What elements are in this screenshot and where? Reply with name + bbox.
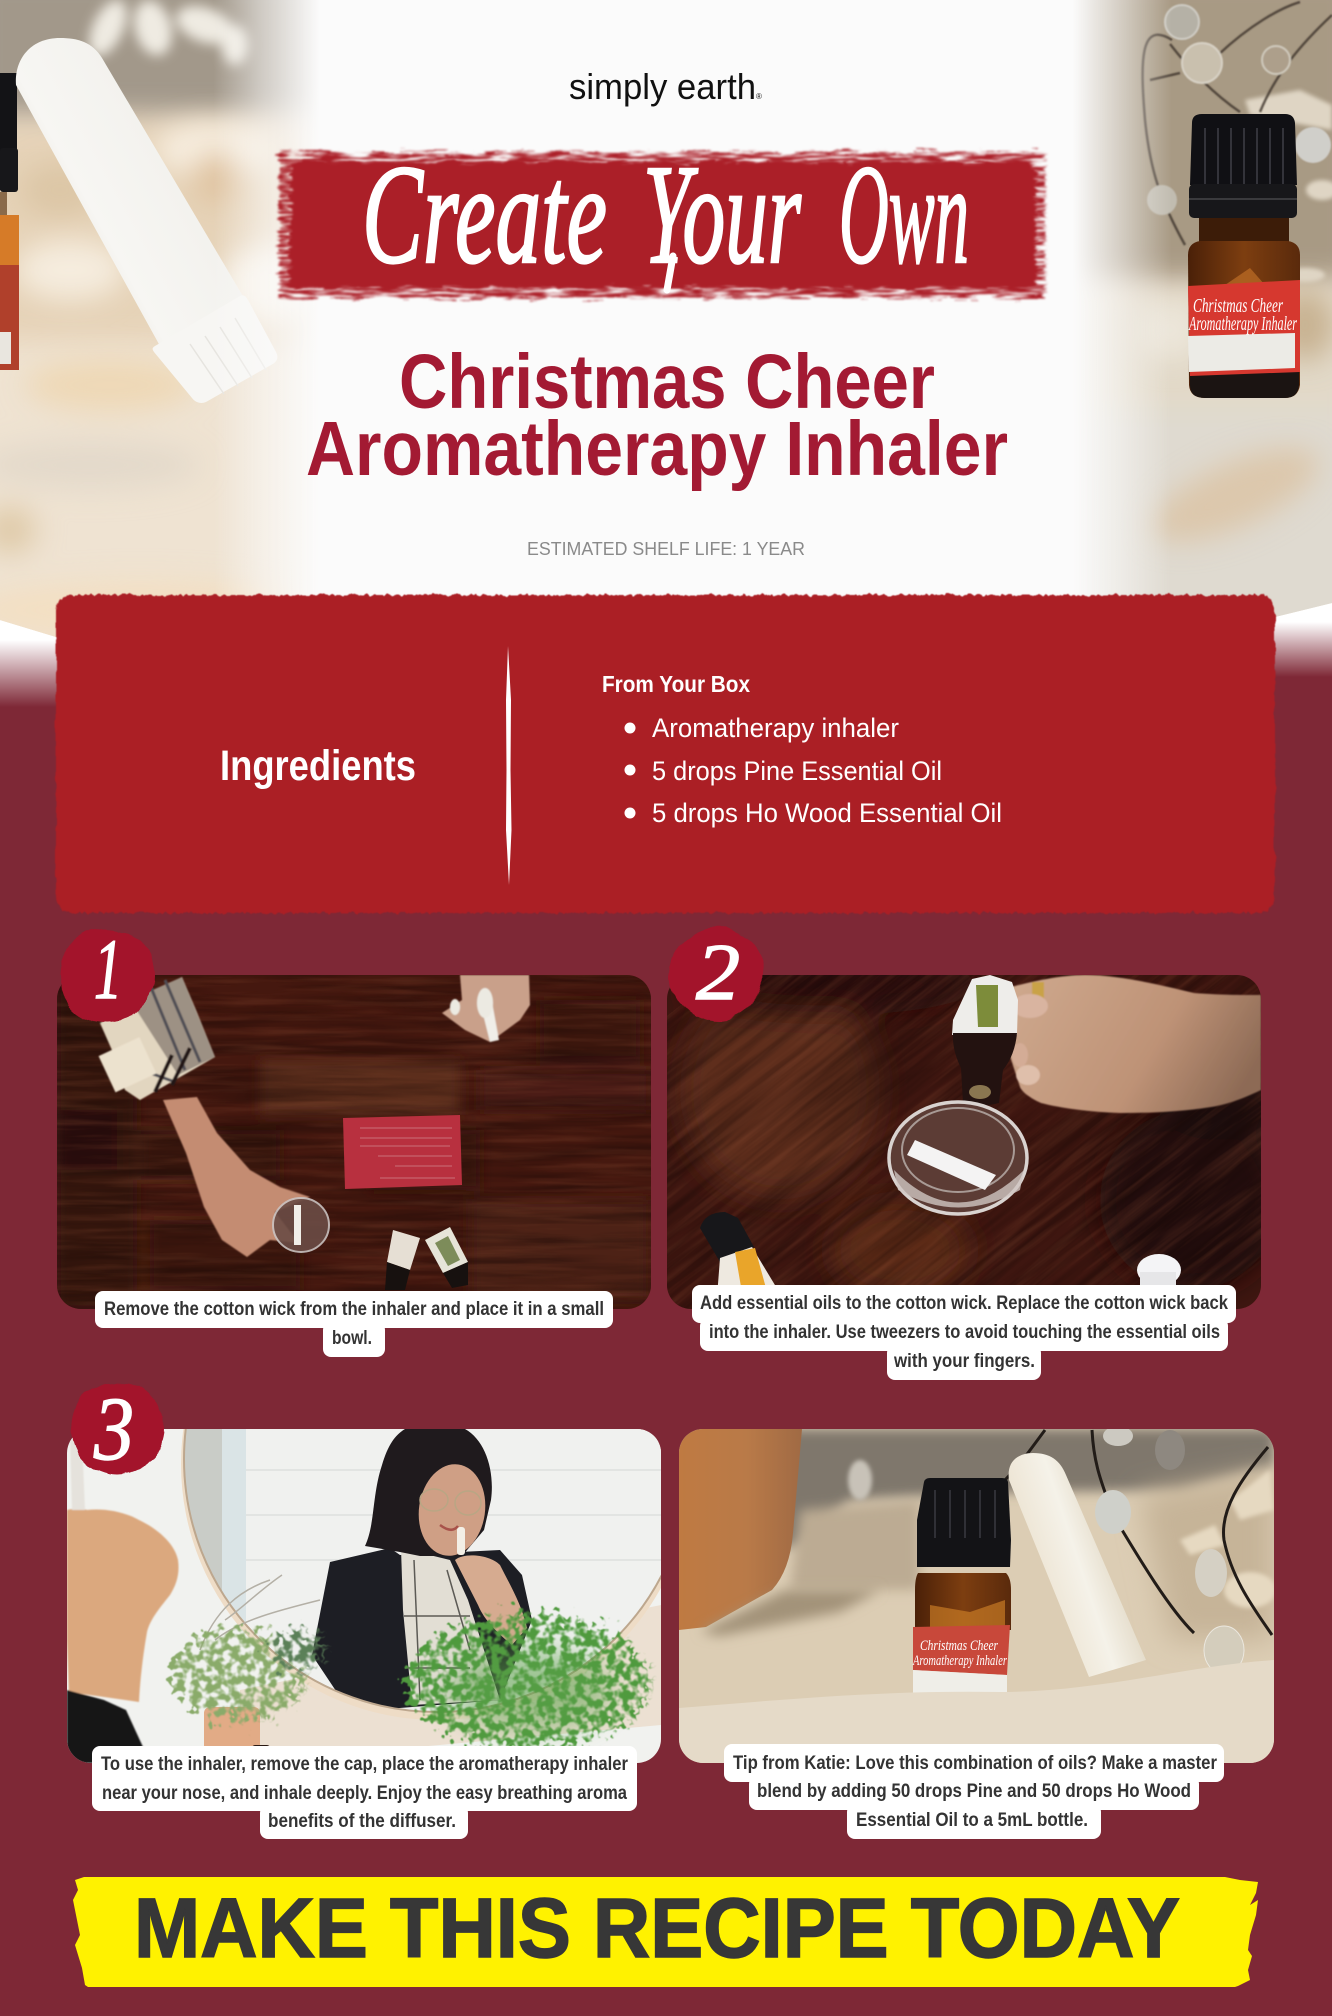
hand in foreground	[67, 1440, 179, 1763]
caption: step 2: Add essential oils to the cotton wick. Replace the cotton wick back	[700, 1293, 1228, 1314]
white centre fade	[220, 0, 1168, 598]
hand	[1007, 975, 1261, 1113]
bowl	[273, 1198, 329, 1252]
badge: step 1: 1	[94, 921, 122, 1017]
light patches	[848, 1460, 1276, 1608]
white glow under header	[0, 590, 1332, 720]
from your box list: From Your Box	[602, 671, 750, 697]
caption: step 1: Remove the cotton wick from the inhaler and place it in a small	[104, 1299, 604, 1320]
badge: step 2: 2	[696, 929, 740, 1017]
from your box list: 5 drops Ho Wood Essential Oil	[652, 798, 1002, 828]
arm and hand	[99, 977, 310, 1257]
photo: step 1 hands on wood table	[57, 975, 651, 1309]
ingredients heading: Ingredients	[220, 742, 416, 790]
from your box list: Aromatherapy inhaler	[652, 713, 899, 743]
bottle	[917, 1478, 1011, 1567]
from your box list: 5 drops Pine Essential Oil	[652, 756, 942, 786]
hand with inhaler	[455, 1555, 527, 1645]
logo: simply earth	[569, 66, 756, 107]
caption: step 3: To use the inhaler, remove the cap, place the aromatherapy inhaler	[101, 1754, 629, 1775]
top hand with inhaler	[442, 975, 530, 1042]
badge: step 3: 3	[93, 1380, 134, 1479]
caption: tip from Katie: Tip from Katie: Love this combination of oils? Make a master	[733, 1753, 1218, 1774]
title: Create Your Own: Your	[643, 135, 801, 293]
badge: step 3	[70, 1380, 164, 1479]
caption: tip from Katie: Essential Oil to a 5mL bottle.	[856, 1810, 1088, 1831]
text: Own	[839, 135, 969, 293]
white cap	[1137, 1254, 1181, 1280]
header photo with white centre	[0, 0, 1332, 700]
lower left bottle	[700, 1212, 754, 1262]
title: Create Your Own	[362, 135, 969, 293]
photo: step 2 adding oil to wick	[667, 975, 1261, 1309]
call to action banner	[73, 1877, 1258, 1987]
bottles	[387, 1230, 420, 1270]
mirror reflection	[185, 1429, 661, 1711]
photo: tip bottle and inhaler on linen: Aromatherapy Inhaler	[912, 1653, 1007, 1669]
logo: ®	[756, 92, 762, 101]
caption: step 1: bowl.	[332, 1328, 372, 1349]
twigs	[1005, 1430, 1272, 1635]
caption: tip from Katie: blend by adding 50 drops Pine and 50 drops Ho Wood	[757, 1781, 1191, 1802]
caption: step 3: near your nose, and inhale deeply. Enjoy the easy breathing aroma	[102, 1783, 627, 1804]
caption: step 2: into the inhaler. Use tweezers to avoid touching the essential oils	[709, 1322, 1220, 1343]
inhaler	[1009, 1453, 1146, 1677]
caption: step 2: with your fingers.	[893, 1351, 1035, 1372]
call to action text: MAKE THIS RECIPE TODAY	[134, 1881, 1180, 1975]
crystals	[1095, 1426, 1244, 1674]
icon: right amber bottle: Christmas Cheer	[1193, 295, 1283, 317]
hair	[365, 1429, 492, 1556]
foreground linen	[679, 1660, 1274, 1763]
panel: ingredients	[56, 595, 1275, 913]
icon: left amber bottle cropped	[0, 73, 19, 370]
title: Create Your Own: Create	[362, 135, 607, 293]
caption: tip from Katie	[724, 1744, 1224, 1839]
twigs and crystals on right	[1143, 2, 1332, 245]
cream fabric blotches	[0, 122, 1332, 638]
badge: step 2	[670, 928, 764, 1022]
blazer	[312, 1548, 532, 1712]
heading: Christmas Cheer Aromatherapy Inhaler: Aromatherapy Inhaler	[306, 406, 1008, 492]
face	[418, 1464, 486, 1556]
badge: step 1	[59, 921, 153, 1022]
from your box list	[602, 671, 1002, 828]
card	[343, 1115, 462, 1189]
left wall shadow leaves	[82, 0, 248, 65]
potted plants	[204, 1707, 260, 1746]
mirror frame	[240, 1605, 661, 1746]
photo: tip bottle and inhaler on linen: Christmas Cheer	[920, 1638, 998, 1654]
caption: step 3: benefits of the diffuser.	[268, 1811, 456, 1832]
turtleneck	[401, 1548, 500, 1705]
icon: white inhaler	[16, 38, 277, 403]
heading: Christmas Cheer Aromatherapy Inhaler	[306, 339, 1008, 492]
caption: step 2	[692, 1285, 1236, 1380]
heading: Christmas Cheer Aromatherapy Inhaler: Christmas Cheer	[399, 339, 935, 425]
right wall reflections	[1245, 90, 1332, 282]
divider	[506, 646, 512, 885]
plaid sleeve	[100, 977, 215, 1100]
caption: step 3	[92, 1746, 637, 1839]
red brush banner	[280, 152, 1046, 298]
icon: right amber bottle	[1188, 114, 1300, 398]
terracotta pot	[679, 1429, 802, 1630]
photo: tip bottle and inhaler on linen	[679, 1426, 1276, 1763]
glass bowl with wick	[889, 1102, 1027, 1214]
caption: step 1	[95, 1291, 613, 1357]
photo: step 3 woman using inhaler in mirror	[67, 1429, 661, 1763]
shelf life note: ESTIMATED SHELF LIFE: 1 YEAR	[527, 538, 805, 559]
dropper bottle	[952, 975, 1018, 1035]
